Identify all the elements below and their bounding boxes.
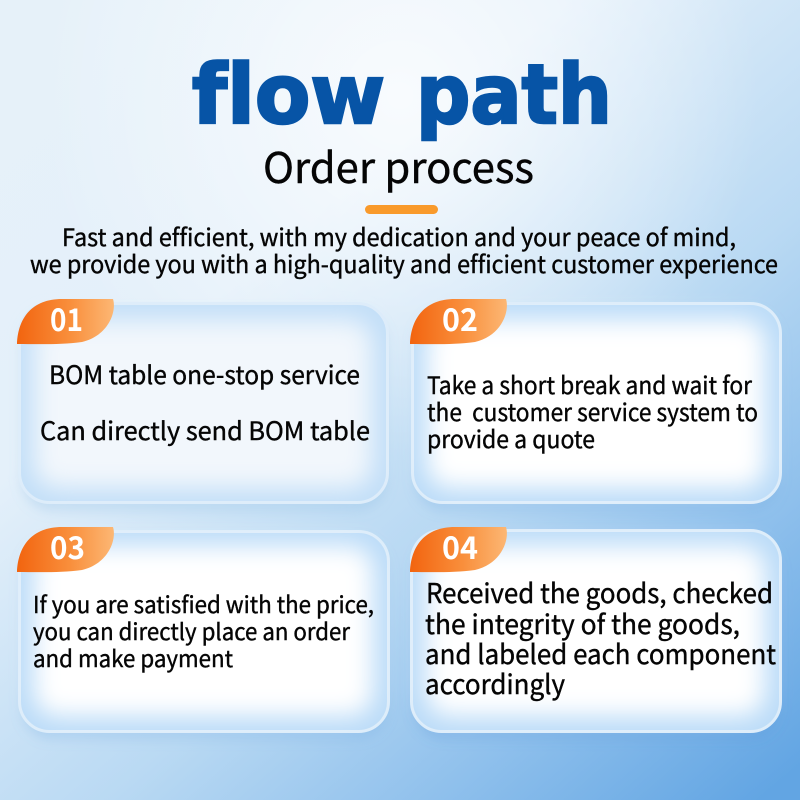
text 04: Received the goods, checked — [426, 572, 773, 611]
badge 03 — [17, 523, 114, 572]
intro text — [30, 218, 778, 280]
badge 01 — [17, 295, 114, 344]
badge 02 — [410, 295, 507, 344]
panel: step 02 — [410, 295, 780, 510]
badge 02: 02 — [442, 295, 478, 340]
badge 04: 04 — [442, 523, 478, 568]
text 01 — [40, 356, 370, 448]
panel: step 04 — [410, 523, 780, 738]
text 02: Take a short break and wait for — [427, 366, 753, 401]
title: flow — [192, 48, 385, 143]
text 03: If you are satisfied with the price, — [33, 586, 374, 620]
title: path — [416, 48, 612, 143]
text 02: provide a quote — [427, 420, 595, 455]
text 02: the customer service system to — [427, 393, 758, 428]
badge 01: 01 — [50, 295, 83, 340]
text 04 — [425, 572, 776, 702]
text 03: and make payment — [33, 640, 233, 674]
title — [192, 48, 612, 143]
subtitle: Order process — [263, 135, 534, 196]
text 04: the integrity of the goods, — [425, 603, 740, 642]
text 04: and labeled each component — [425, 633, 776, 672]
badge 04 — [410, 523, 507, 572]
intro text: Fast and efficient, with my dedication and your peace of mind, — [62, 218, 736, 253]
text 03: you can directly place an order — [33, 613, 350, 647]
text 04: accordingly — [425, 663, 565, 702]
panel: step 01 — [17, 295, 388, 510]
text 02 — [427, 366, 758, 455]
intro text: we provide you with a high-quality and efficient customer experience — [30, 245, 778, 280]
text 01: BOM table one-stop service — [49, 356, 360, 392]
badge 03: 03 — [50, 523, 85, 568]
text 03 — [33, 586, 374, 674]
orange accent bar — [365, 205, 438, 214]
text 01: Can directly send BOM table — [40, 412, 370, 448]
panel: step 03 — [17, 523, 388, 738]
